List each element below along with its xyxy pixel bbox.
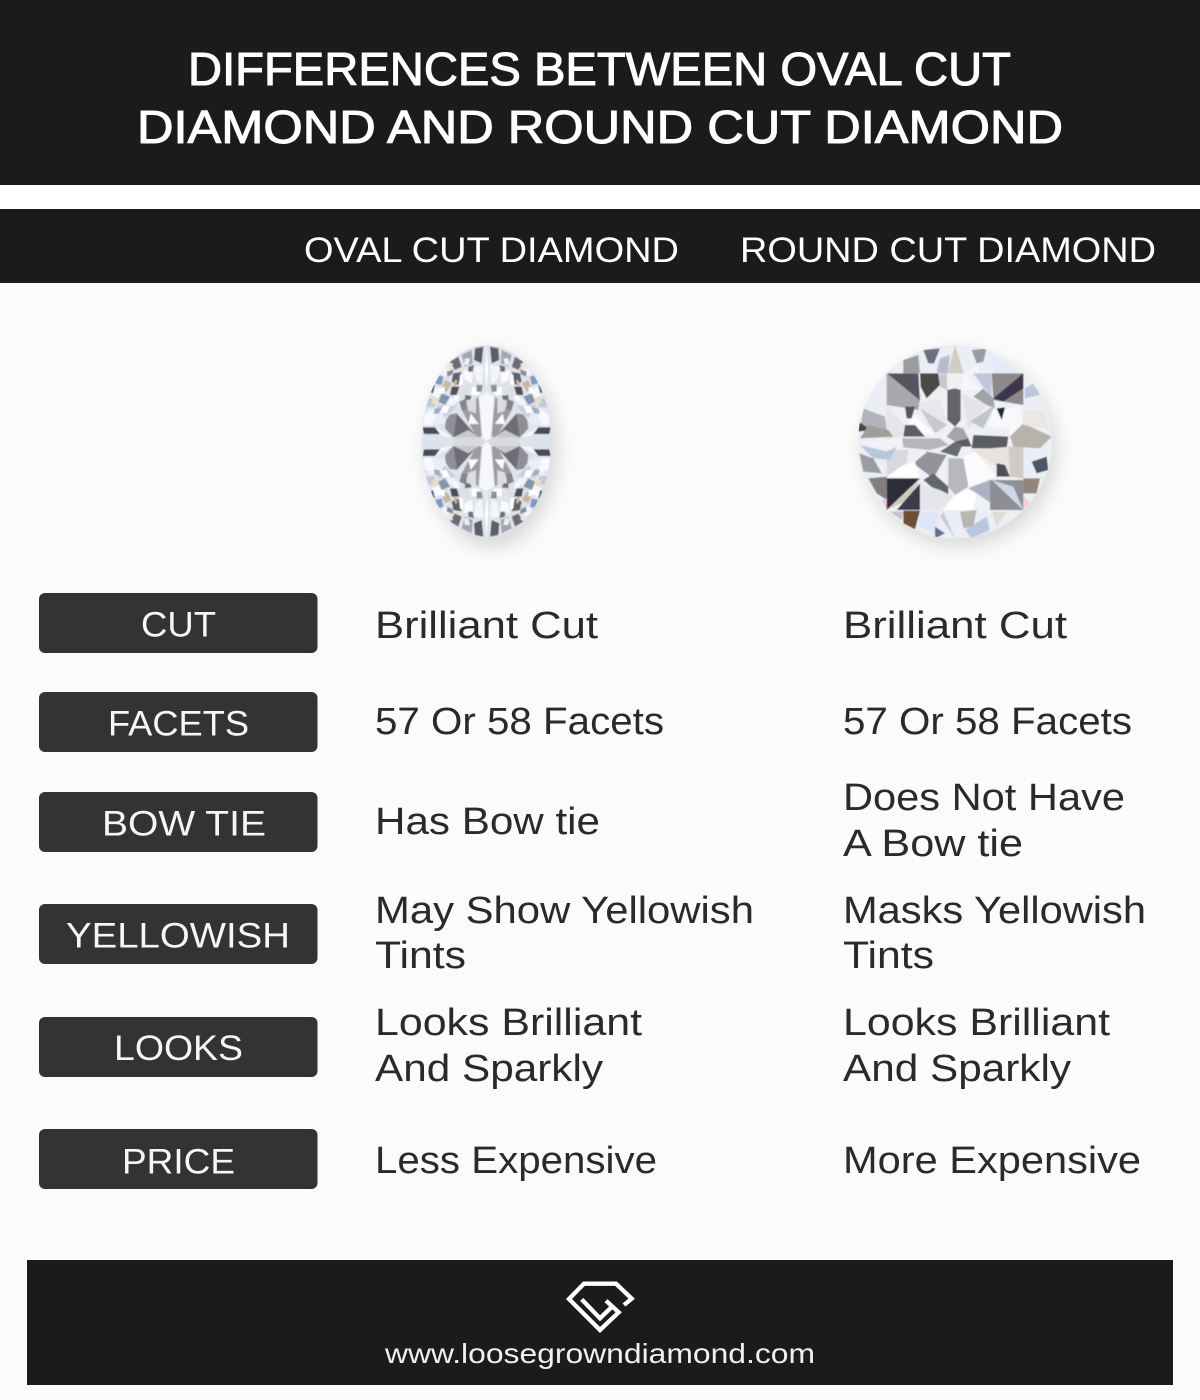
oval value: looks: And Sparkly — [375, 1048, 603, 1090]
website url: www.loosegrowndiamond.com — [384, 1338, 815, 1369]
row: cut — [39, 593, 1067, 653]
row: facets — [39, 692, 1132, 752]
round value: looks — [843, 1002, 1110, 1090]
oval value: price: Less Expensive — [375, 1140, 657, 1182]
title banner — [0, 0, 1200, 185]
oval value: facets: 57 Or 58 Facets — [375, 701, 664, 743]
column header band — [0, 209, 1200, 283]
title: DIAMOND AND ROUND CUT DIAMOND — [137, 101, 1063, 153]
label: bow tie — [39, 792, 318, 852]
column heading: round: ROUND CUT DIAMOND — [740, 231, 1156, 270]
label: facets: FACETS — [108, 704, 249, 744]
title — [137, 43, 1063, 153]
oval value: cut: Brilliant Cut — [375, 605, 598, 647]
round value: yellowish: Tints — [843, 935, 934, 977]
row: looks — [39, 1002, 1110, 1090]
label: cut: CUT — [141, 606, 216, 644]
label: yellowish — [39, 904, 318, 964]
icon: diamond logo — [569, 1284, 632, 1330]
oval value: bow tie: Has Bow tie — [375, 801, 600, 843]
row: bow tie — [39, 777, 1125, 865]
round value: yellowish — [843, 890, 1146, 977]
label: looks: LOOKS — [114, 1029, 243, 1068]
label: cut — [39, 593, 318, 653]
label: facets — [39, 692, 318, 752]
round value: price: More Expensive — [843, 1140, 1141, 1182]
title: DIFFERENCES BETWEEN OVAL CUT — [188, 43, 1011, 95]
oval value: looks: Looks Brilliant — [375, 1002, 642, 1044]
footer band — [27, 1260, 1173, 1385]
round value: yellowish: Masks Yellowish — [843, 890, 1146, 932]
round value: facets: 57 Or 58 Facets — [843, 701, 1132, 743]
icon: oval diamond — [420, 343, 558, 548]
label: price — [39, 1129, 318, 1189]
icon: round diamond — [857, 343, 1057, 547]
row: yellowish — [39, 890, 1146, 977]
round value: bow tie: Does Not Have — [843, 777, 1125, 819]
oval value: yellowish: May Show Yellowish — [375, 890, 754, 932]
label: yellowish: YELLOWISH — [66, 916, 290, 956]
label: looks — [39, 1017, 318, 1077]
round value: cut: Brilliant Cut — [843, 605, 1067, 647]
row: price — [39, 1129, 1141, 1189]
label: bow tie: BOW TIE — [102, 804, 266, 844]
round value: bow tie — [843, 777, 1125, 865]
round value: looks: Looks Brilliant — [843, 1002, 1110, 1044]
column heading: oval: OVAL CUT DIAMOND — [304, 231, 679, 270]
oval value: looks — [375, 1002, 642, 1090]
label: price: PRICE — [122, 1142, 235, 1182]
oval value: yellowish — [375, 890, 754, 977]
round value: looks: And Sparkly — [843, 1048, 1071, 1090]
oval value: yellowish: Tints — [375, 935, 466, 977]
round value: bow tie: A Bow tie — [843, 823, 1023, 865]
